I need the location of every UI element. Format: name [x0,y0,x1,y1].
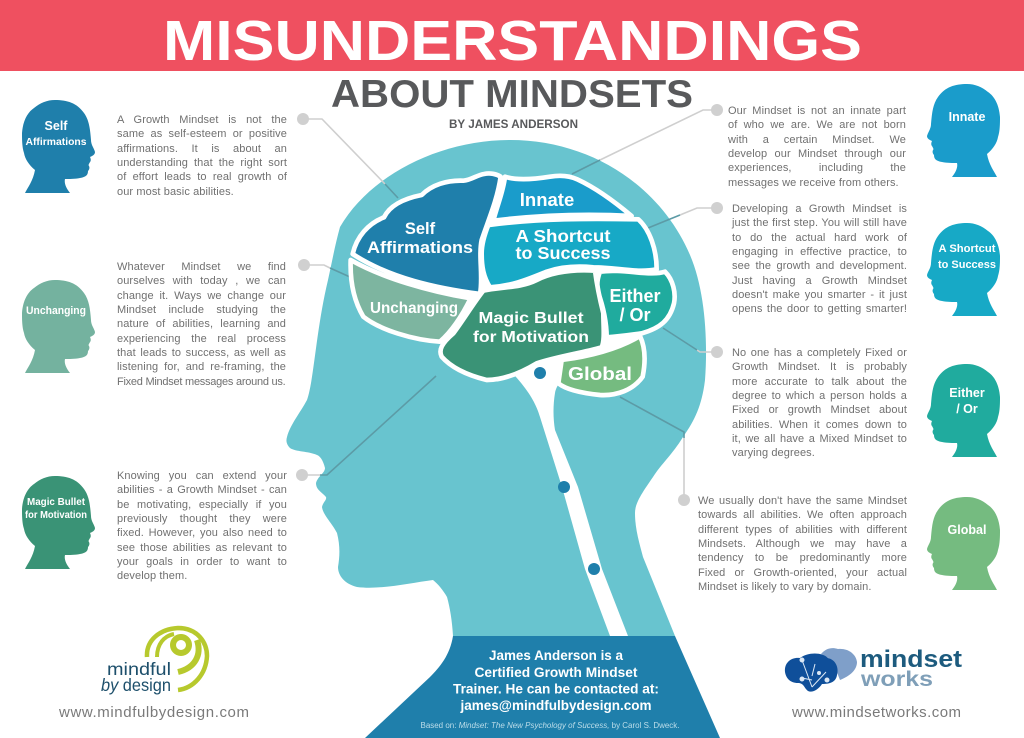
text: self affirmations [117,114,287,198]
logo: mindset works: works [860,668,933,691]
text: self affirmations: understanding that the right sort [117,157,287,169]
bottom banner: Based on: Mindset: The New Psychology of Success, by Carol S. Dweck. [420,721,680,730]
text: either or [732,347,907,459]
text: magic bullet: develop them. [117,570,187,582]
brain labels: Innate [520,189,574,210]
text: a shortcut to success: just the first step. You will still have [732,217,907,229]
head icon: innate [927,84,1000,177]
head icon: unchanging: Unchanging [26,305,86,317]
text: a shortcut to success [732,203,907,315]
text: innate: develop our Mindset through our [728,148,906,160]
brain labels: A Shortcut [516,226,611,246]
text: magic bullet: Knowing you can extend your [117,470,287,482]
text: innate: with a certain Mindset. We [728,134,906,146]
bottom banner: James Anderson is a [489,648,623,663]
url: mindset works: www.mindsetworks.com [791,704,961,721]
text: unchanging: that leads to success, as well as [117,347,286,359]
text: unchanging: Whatever Mindset we find [117,261,286,273]
bottom banner [365,636,720,738]
text: magic bullet: fixed. However, you also need to [117,527,287,539]
logo: mindset works: mindset [860,646,962,673]
brain stem and spinal cord [500,350,628,636]
text: magic bullet: be motivating, especially if you [117,499,287,511]
text: innate: Our Mindset is not an innate part [728,105,906,117]
text: unchanging: Mindset include studying the [117,304,286,316]
text: a shortcut to success: see the growth and development. [732,260,907,272]
brain labels: Affirmations [367,239,473,257]
connector dots [296,104,723,506]
text: either or: it, we all have a Mixed Mindset to [732,433,907,445]
brain labels [367,189,661,384]
logo: mindful by design [101,628,207,695]
text: a shortcut to success: engaging in effective practice, to [732,246,907,258]
head icon: either or [927,364,1000,457]
logo: mindful by design: by design [101,675,171,695]
text: global: towards all abilities. We often approach [698,509,907,521]
head icon: a shortcut to success: to Success [938,259,996,271]
title banner [0,0,1024,73]
head icon: magic bullet: for Motivation [25,510,87,521]
text: global: tendency to be predominantly more [698,552,907,564]
subtitle: ABOUT MINDSETS [331,73,693,116]
connector lines [302,110,717,500]
central head silhouette [286,140,706,636]
text: either or: varying degrees. [732,447,815,459]
text: unchanging: experiencing the real process [117,333,286,345]
text: magic bullet: previously thought they were [117,513,287,525]
brain white backing [373,180,657,380]
text: a shortcut to success: to do the actual hard work of [732,232,907,244]
head icon: self affirmations [22,100,95,193]
text: either or: degree to which a person holds a [732,390,907,402]
text: global: different types of abilities with different [698,524,907,536]
url: mindful by design: www.mindfulbydesign.com [58,704,249,721]
head icon: self affirmations: Self [45,119,68,133]
text: either or: abilities. When it comes down to [732,419,907,431]
brain labels: Self [405,220,436,238]
text: a shortcut to success: doesn't make you smarter - it just [732,289,907,301]
text: self affirmations: same as self-esteem or positive [117,128,287,140]
lobe: unchanging [351,260,471,342]
byline: BY JAMES ANDERSON [449,119,578,131]
text: unchanging [117,261,286,388]
text: a shortcut to success: opens the door to getting smarter! [732,303,907,315]
text: global: Mindsets. Although we may have a [698,538,907,550]
text: global: Fixed or Growth-oriented, your actual [698,567,907,579]
head icon: global [927,497,1000,590]
lobe: global [558,336,645,395]
text: a shortcut to success: Just having a Growth Mindset [732,275,907,287]
text: unchanging: listening for, and re-framing, the [117,361,286,373]
head icon: magic bullet [22,476,95,569]
bottom banner: james@mindfulbydesign.com [459,698,652,713]
text: unchanging: nature of abilities, learning and [117,318,286,330]
text: self affirmations: our most basic abilities. [117,186,234,198]
text: either or: more accurate to talk about the [732,376,907,388]
title banner: MISUNDERSTANDINGS [163,9,862,73]
brain labels: Magic Bullet [478,310,584,327]
head icon: self affirmations: Affirmations [26,136,87,148]
lobe: either or [597,271,675,337]
head icon: a shortcut to success [927,223,1000,316]
text: a shortcut to success: Developing a Growth Mindset is [732,203,907,215]
text: magic bullet [117,470,287,582]
head icon: innate: Innate [949,110,985,124]
text: unchanging: Fixed Mindset messages around us. [117,376,285,388]
text: unchanging: change it. Ways we change our [117,290,286,302]
spine dots [534,367,600,575]
text: global: We usually don't have the same Mindset [698,495,907,507]
brain labels: to Success [516,243,611,263]
text: magic bullet: your goals in order to want to [117,556,287,568]
head icon: global: Global [948,523,986,537]
text: either or: No one has a completely Fixed or [732,347,907,359]
text: innate: messages we receive from others. [728,177,899,189]
brain labels: Either [609,286,661,306]
text: innate [728,105,906,189]
text: unchanging: ourselves with today , we can [117,275,286,287]
head icon: magic bullet: Magic Bullet [27,497,86,508]
text: either or: Fixed or growth Mindset about [732,404,907,416]
logo: mindful by design: mindful [107,659,171,679]
lobe: a shortcut to success [482,219,657,287]
text: either or: Growth Mindset. It is probably [732,361,907,373]
brain [351,173,675,395]
head icon: either or: / Or [956,402,978,416]
head icon: unchanging [22,280,95,373]
text: innate: experiences, including the [728,162,906,174]
text: self affirmations: of effort leads to real growth of [117,171,287,183]
text: innate: of who we are. We are not born [728,119,906,131]
lobe: self affirmations [353,173,501,294]
lobe: magic bullet [440,270,604,380]
lobe: innate [493,176,632,221]
brain labels: Unchanging [370,300,458,317]
head icon: either or: Either [949,386,985,400]
brain labels: / Or [619,305,651,325]
head icon: a shortcut to success: A Shortcut [938,243,996,255]
bottom banner: Trainer. He can be contacted at: [453,682,659,696]
text: global [698,495,907,593]
text: magic bullet: see those abilities as relevant to [117,542,287,554]
bottom banner: Certified Growth Mindset [474,665,638,680]
logo: mindset works [785,646,962,692]
text: self affirmations: affirmations. It is about an [117,143,287,155]
text: self affirmations: A Growth Mindset is not the [117,114,287,126]
text: global: Mindset is likely to vary by domain. [698,581,872,593]
brain labels: for Motivation [473,329,589,346]
text: magic bullet: abilities - a Growth Mindset - can [117,484,287,496]
brain labels: Global [568,364,632,384]
